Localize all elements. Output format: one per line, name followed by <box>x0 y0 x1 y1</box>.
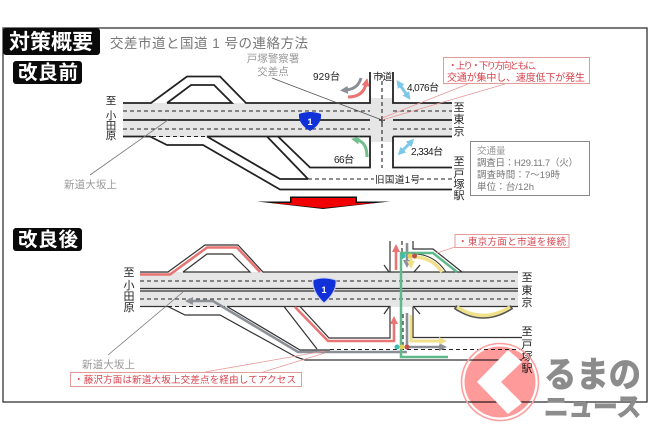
direction: to Totsuka station: 駅 <box>454 189 464 202</box>
direction: to Odawara: 田 <box>124 291 134 303</box>
arrow: 4,076 vehicles <box>400 85 407 95</box>
direction: to Totsuka station: 至 <box>454 156 464 168</box>
panel: traffic survey <box>470 142 590 196</box>
direction: to Tokyo: 至 <box>454 102 464 114</box>
label: city road: 市道 <box>373 71 392 83</box>
traffic count 929: 929台 <box>313 70 340 83</box>
route: green connection <box>401 253 457 357</box>
callout: Tokyo connection <box>437 234 569 253</box>
panel: traffic survey: 単位：台/12h <box>477 181 534 193</box>
callout: Tokyo connection: ・東京方面と市道を接続 <box>458 236 566 248</box>
signal: lower <box>394 344 410 350</box>
direction: to Tokyo <box>454 102 464 138</box>
label: police station crossing: 戸塚警察署 <box>247 52 299 65</box>
route: yellow ramps <box>411 254 512 341</box>
panel: traffic survey: 交通量 <box>477 146 506 157</box>
direction: to Odawara: 田 <box>106 120 116 132</box>
watermark logo <box>462 344 641 422</box>
leader: police station crossing <box>272 78 382 120</box>
direction: to Tokyo <box>522 272 532 309</box>
big red arrow <box>257 196 390 209</box>
direction: to Totsuka station: 塚 <box>522 349 532 363</box>
brand subtitle: ニュース <box>544 392 641 422</box>
callout: congestion: 交通が集中し、速度低下が発生 <box>447 71 585 84</box>
panel: traffic survey: 調査時間：7～19時 <box>477 169 560 181</box>
arrows: 929 vehicles <box>346 78 366 97</box>
direction: to Totsuka station: 戸 <box>454 168 464 180</box>
label: Shindo Osakagami: 新道大坂上 <box>82 358 135 371</box>
brand name: るまの <box>544 356 641 395</box>
direction: to Odawara: 小 <box>106 110 117 122</box>
leader: Shindo Osakagami <box>108 292 183 355</box>
direction: to Totsuka station: 戸 <box>522 339 532 351</box>
direction: to Tokyo: 京 <box>454 125 464 138</box>
direction: to Tokyo: 東 <box>454 113 464 126</box>
direction: to Totsuka station <box>522 326 532 375</box>
subtitle: 交差市道と国道 1 号の連絡方法 <box>110 36 308 51</box>
label: police station crossing <box>247 52 299 78</box>
callout: congestion: ・上り・下り方向ともに、 <box>448 60 542 72</box>
road surface <box>123 98 452 142</box>
traffic count 4,076: 4,076台 <box>407 81 439 94</box>
signal: upper <box>400 254 417 258</box>
direction: to Tokyo: 至 <box>522 272 532 284</box>
diagram: before improvement <box>64 52 590 202</box>
diagram: after improvement <box>70 234 569 386</box>
direction: to Totsuka station <box>454 156 464 202</box>
traffic count 2,334: 2,334台 <box>411 145 443 158</box>
route: gray to Fujisawa <box>191 243 441 352</box>
direction: to Totsuka station: 駅 <box>522 362 532 375</box>
callout: Fujisawa access <box>70 351 325 386</box>
leader: Shindo Osakagami <box>90 120 168 175</box>
direction: to Odawara: 至 <box>124 267 134 279</box>
arrow: 66 vehicles <box>357 140 367 157</box>
callout: Fujisawa access: ・藤沢方面は新道大坂上交差点を経由してアクセス <box>74 374 296 386</box>
label: Shindo Osakagami: 新道大坂上 <box>64 178 117 191</box>
direction: to Odawara: 原 <box>124 302 134 314</box>
icon: route 1 shield: 1 <box>307 117 313 127</box>
heading: before improvement: 改良前 <box>18 62 78 84</box>
road lines <box>123 72 452 190</box>
label: old route 1: 旧国道1号 <box>375 174 420 186</box>
route: red to city road <box>140 248 396 341</box>
direction: to Totsuka station: 塚 <box>454 177 464 191</box>
icon: route 1 shield <box>313 278 336 303</box>
direction: to Odawara: 小 <box>124 279 134 292</box>
direction: to Tokyo: 東 <box>522 284 532 297</box>
direction: to Totsuka station: 至 <box>522 326 532 338</box>
panel: traffic survey: 調査日：H29.11.7（火） <box>477 157 578 169</box>
label: police station crossing: 交差点 <box>257 65 289 78</box>
callout: congestion <box>382 58 590 120</box>
icon: red circle chevron <box>462 344 538 420</box>
direction: to Odawara: 至 <box>106 95 116 107</box>
direction: to Odawara: 原 <box>106 130 117 142</box>
heading: after improvement: 改良後 <box>18 229 78 251</box>
title badge: 対策概要 <box>9 31 93 54</box>
icon: route 1 shield: 1 <box>321 285 327 295</box>
traffic count 66: 66台 <box>334 153 354 166</box>
direction: to Odawara <box>106 95 117 142</box>
road lines <box>140 241 522 360</box>
arrow: 2,334 vehicles <box>402 143 410 151</box>
icon: route 1 shield <box>299 112 321 131</box>
direction: to Odawara <box>124 267 134 314</box>
road surface <box>140 272 518 307</box>
direction: to Tokyo: 京 <box>522 296 532 309</box>
